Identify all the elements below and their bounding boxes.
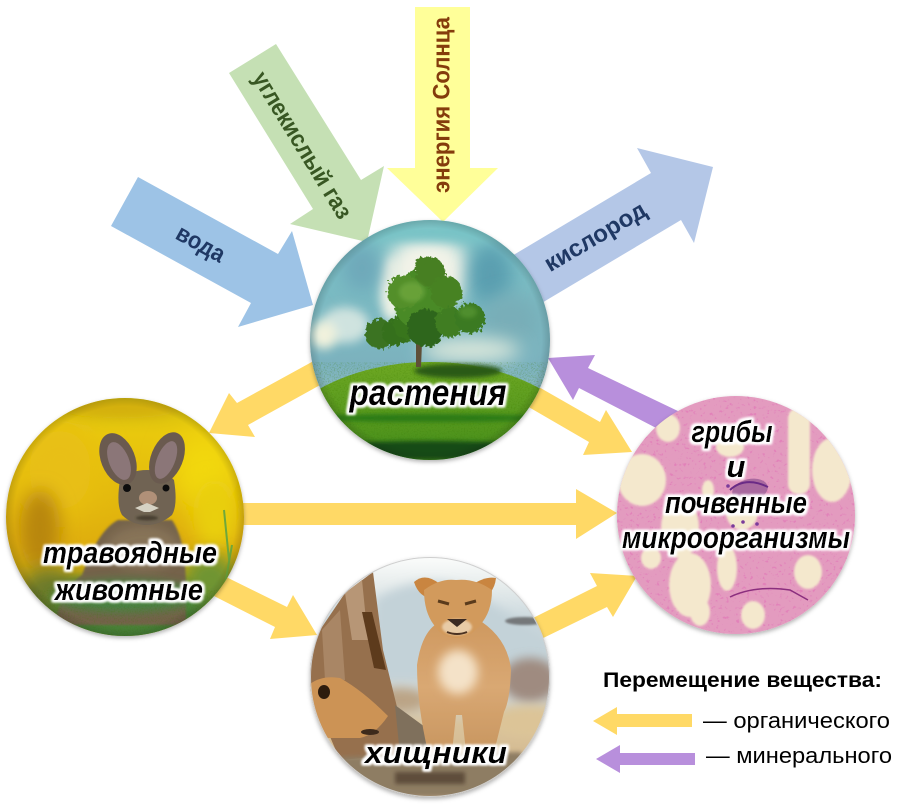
label: plants: растения	[349, 372, 507, 413]
circle: herbivores	[5, 398, 245, 655]
circle: plants	[308, 220, 552, 464]
arrow: oxygen out of plants	[500, 148, 713, 310]
label line: fungi: грибы	[692, 414, 772, 449]
label: predators: хищники	[363, 735, 507, 770]
label: herbivores	[43, 535, 217, 607]
arrow label: solar energy: энергия Солнца	[428, 16, 455, 193]
arrow: herbivores to predators	[210, 574, 317, 639]
label: fungi and soil microorganisms	[622, 414, 850, 555]
legend	[593, 669, 892, 773]
arrow: plants to herbivores	[209, 352, 340, 437]
label line 2: животные	[53, 572, 203, 607]
arrow label: carbon dioxide: углекислый газ	[247, 67, 357, 224]
arrow: microorganisms mineral return to plants	[548, 355, 680, 430]
arrow: water into plants	[111, 177, 313, 327]
label line 1: травоядные	[43, 535, 217, 570]
arrow label: oxygen: кислород	[539, 196, 651, 278]
legend text: organic: — органического	[703, 708, 890, 733]
legend heading: Перемещение вещества:	[603, 669, 882, 692]
thin grey rim	[310, 558, 550, 796]
label line: and: и	[727, 449, 746, 484]
legend arrow: organic	[593, 707, 692, 735]
arrow label: water: вода	[171, 220, 230, 269]
arrow: predators to microorganisms	[525, 573, 637, 642]
circle: predators	[310, 557, 568, 797]
circle: fungi and soil microorganisms	[617, 396, 855, 634]
label line: microorganisms: микроорганизмы	[622, 520, 850, 555]
legend arrow: mineral	[596, 745, 695, 773]
arrow: carbon dioxide into plants	[229, 44, 384, 242]
label line: soil: почвенные	[665, 485, 807, 520]
arrow: solar energy into plants	[387, 7, 498, 222]
legend text: mineral: — минерального	[706, 743, 892, 768]
arrow: herbivores to microorganisms	[235, 489, 617, 539]
arrow: plants to microorganisms	[520, 382, 632, 455]
